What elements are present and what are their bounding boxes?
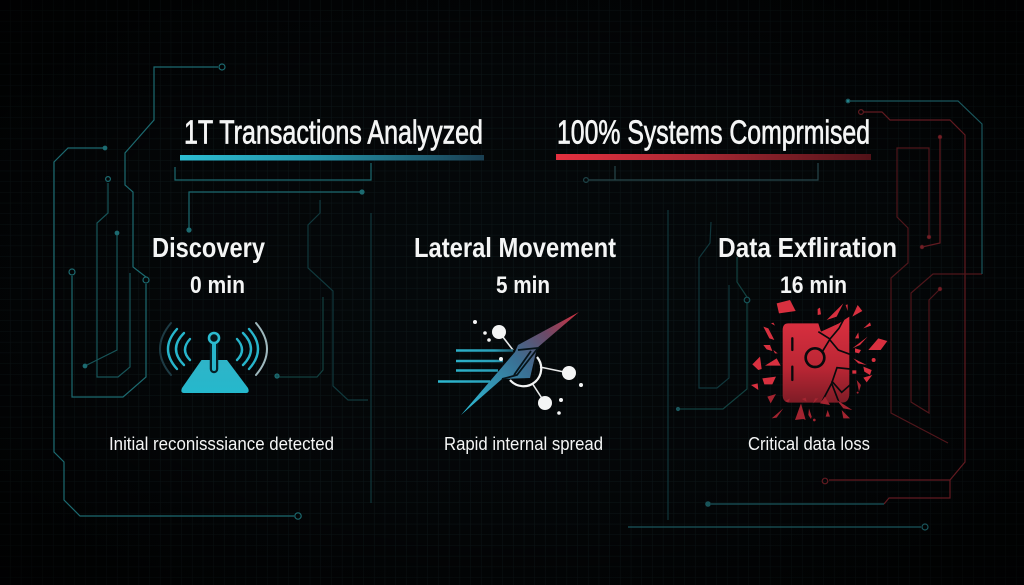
column: discovery	[109, 232, 334, 454]
circuit traces: right red	[822, 110, 982, 504]
lateral movement heading: Lateral Movement	[414, 232, 616, 263]
icon: shattered vault	[751, 300, 887, 421]
stat: transactions analyzed	[180, 114, 484, 160]
discovery description: Initial reconisssiance detected	[109, 434, 334, 454]
stat heading right: 100% Systems Comprmised	[557, 114, 870, 150]
stat heading left: 1T Transactions Analyyzed	[184, 114, 483, 150]
data exfiltration time: 16 min	[780, 272, 847, 299]
data exfiltration description: Critical data loss	[748, 434, 870, 454]
discovery time: 0 min	[190, 272, 245, 299]
red underline bar	[556, 154, 871, 160]
lateral movement description: Rapid internal spread	[444, 434, 603, 454]
circuit traces: left teal	[54, 64, 371, 519]
circuit traces: right teal	[584, 99, 982, 530]
icon: network compass	[438, 312, 583, 415]
lateral movement time: 5 min	[496, 272, 550, 299]
icon: signal tower	[160, 323, 267, 393]
column: data exfiltration	[718, 232, 897, 454]
stat: systems compromised	[556, 114, 871, 160]
cyan underline bar	[180, 155, 484, 160]
column: lateral movement	[414, 232, 616, 454]
discovery heading: Discovery	[152, 232, 265, 263]
data exfiltration heading: Data Exfliration	[718, 232, 897, 263]
